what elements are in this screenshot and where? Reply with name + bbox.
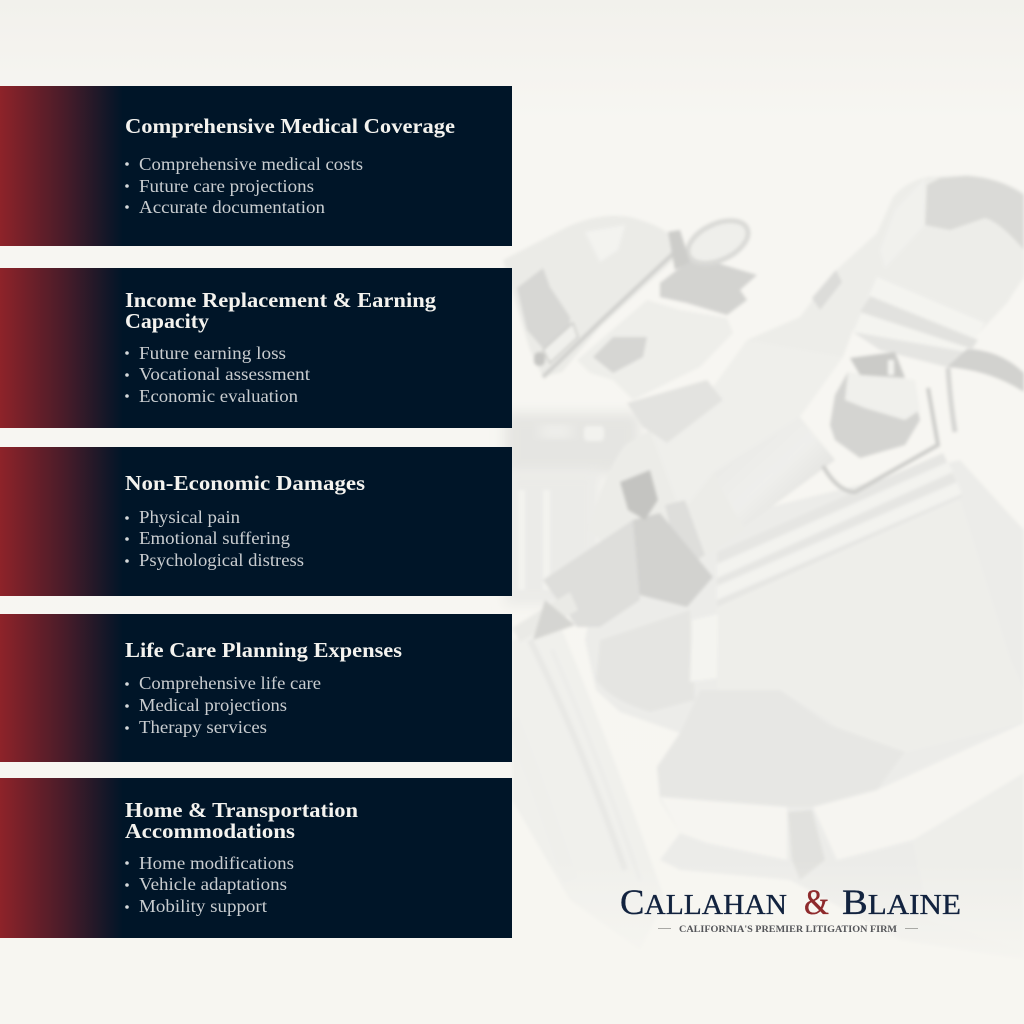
- heading: Income Replacement & Earning: [125, 288, 436, 312]
- photo fade toward page bottom: [512, 860, 1024, 980]
- bullet list: Future care projections: [139, 176, 314, 196]
- photo: collar: [627, 380, 723, 443]
- logo wordmark: &: [804, 882, 829, 922]
- logo: Callahan & Blaine: [620, 882, 961, 935]
- bullet list: Therapy services: [139, 717, 267, 737]
- bullet list: Psychological distress: [139, 550, 304, 570]
- bullet list: Vocational assessment: [139, 364, 310, 384]
- bullet list: Medical projections: [139, 695, 287, 715]
- photo: reflective stripes on coat: [717, 453, 963, 607]
- bullet list: Comprehensive medical costs: [139, 154, 363, 174]
- heading: [125, 798, 358, 843]
- heading: Life Care Planning Expenses: [125, 638, 402, 662]
- logo wordmark: CALLAHAN: [620, 882, 787, 922]
- bullet list: [125, 154, 363, 217]
- logo wordmark: [620, 882, 961, 922]
- bullet list: Mobility support: [139, 896, 267, 916]
- panel: Home & Transportation Accommodations: [0, 778, 512, 938]
- photo: left shoulder: [590, 430, 700, 560]
- bullet list: Emotional suffering: [139, 528, 290, 548]
- bullet list: [125, 853, 294, 916]
- photo: blurred fire truck behind: [505, 413, 640, 605]
- bullet list: Accurate documentation: [139, 197, 325, 217]
- photo: raised sleeve: [747, 175, 1024, 367]
- panel: Comprehensive Medical Coverage: [0, 86, 512, 246]
- heading: Non-Economic Damages: [125, 471, 365, 495]
- photo: tool handle: [823, 388, 938, 492]
- logo wordmark: BLAINE: [842, 882, 961, 922]
- photo: chest panel: [650, 340, 843, 510]
- photo: hose at right: [947, 349, 1024, 392]
- photo: strap: [948, 368, 955, 432]
- panel: Life Care Planning Expenses: [0, 614, 512, 762]
- bullet list: Vehicle adaptations: [139, 874, 287, 894]
- photo: dark hood: [660, 260, 757, 315]
- photo: hydraulic tool: [512, 417, 835, 642]
- photo: helmet rear ring: [681, 212, 755, 272]
- bullet list: Physical pain: [139, 507, 240, 527]
- photo: face: [577, 300, 733, 400]
- heading: Home & Transportation: [125, 798, 358, 822]
- heading: Comprehensive Medical Coverage: [125, 114, 455, 138]
- background photo: firefighter with rescue tool: [503, 175, 1024, 960]
- photo: car roof lines lower left: [512, 625, 665, 950]
- bullet list: [125, 507, 304, 570]
- photo: goggles: [593, 337, 647, 373]
- bullet list: Home modifications: [139, 853, 294, 873]
- bullet list: [125, 673, 321, 737]
- photo: glove: [830, 352, 920, 458]
- heading: [125, 288, 436, 333]
- bullet list: Future earning loss: [139, 343, 286, 363]
- logo tagline: CALIFORNIA'S PREMIER LITIGATION FIRM: [679, 925, 897, 935]
- panel: Income Replacement & Earning Capacity: [0, 268, 512, 428]
- heading: Capacity: [125, 309, 209, 333]
- bullet list: Economic evaluation: [139, 386, 298, 406]
- bullet list: [125, 343, 310, 406]
- photo: lower coat and back: [585, 460, 1024, 960]
- bullet list: Comprehensive life care: [139, 673, 321, 693]
- photo: helmet: [503, 216, 690, 377]
- panel: Non-Economic Damages: [0, 447, 512, 596]
- heading: Accommodations: [125, 819, 295, 843]
